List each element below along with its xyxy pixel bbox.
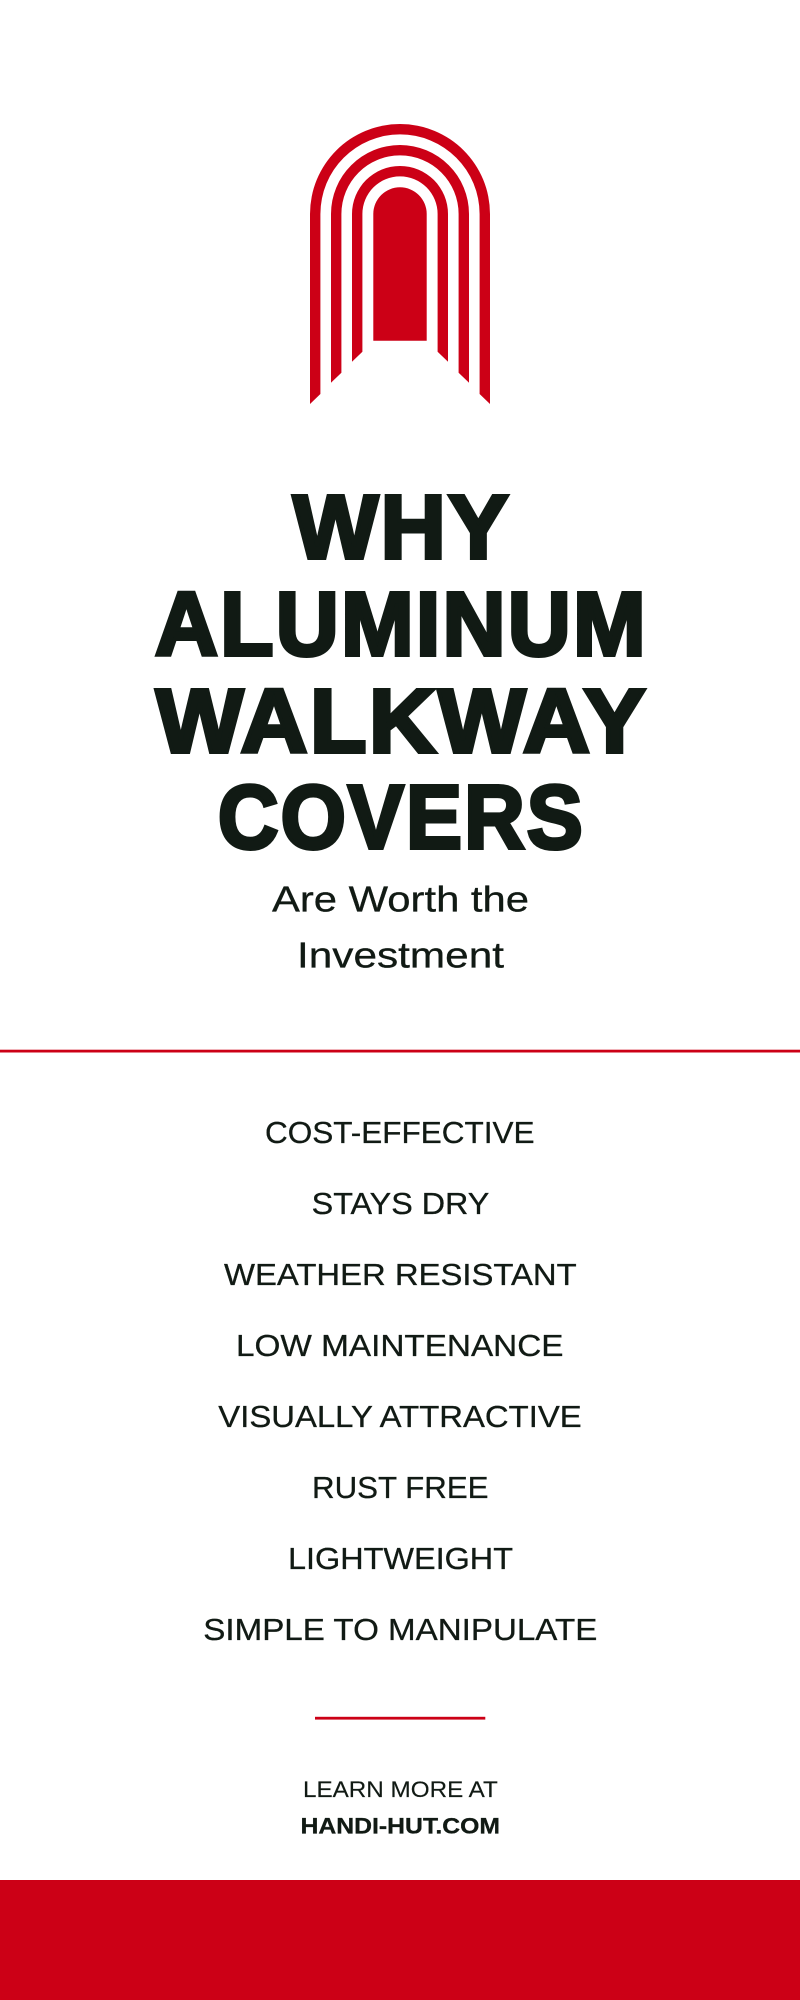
call to action: learn more: LEARN MORE AT (303, 1777, 498, 1802)
call to action: learn more: HANDI-HUT.COM (300, 1813, 500, 1838)
short divider line (315, 1717, 485, 1720)
title: WHY (293, 478, 511, 578)
benefit: lightweight: LIGHTWEIGHT (288, 1542, 513, 1576)
subtitle: Investment (297, 935, 504, 976)
benefits list (203, 1116, 597, 1647)
title: WALKWAY (156, 672, 648, 772)
subtitle (272, 879, 529, 976)
footer bar (0, 1880, 800, 2000)
benefit: weather resistant: WEATHER RESISTANT (224, 1258, 577, 1292)
benefit: rust free: RUST FREE (312, 1471, 488, 1505)
benefit: low maintenance: LOW MAINTENANCE (236, 1329, 564, 1363)
benefit: simple to manipulate: SIMPLE TO MANIPULATE (203, 1613, 597, 1647)
call to action: learn more (300, 1777, 500, 1838)
title: ALUMINUM (155, 575, 648, 675)
divider line (0, 1050, 800, 1052)
benefit: visually attractive: VISUALLY ATTRACTIVE (218, 1400, 582, 1434)
icon: walkway cover arches (310, 124, 490, 404)
benefit: cost-effective: COST-EFFECTIVE (265, 1116, 534, 1150)
title (155, 478, 648, 868)
benefit: stays dry: STAYS DRY (312, 1187, 489, 1221)
title: COVERS (218, 768, 585, 868)
subtitle: Are Worth the (272, 879, 529, 920)
